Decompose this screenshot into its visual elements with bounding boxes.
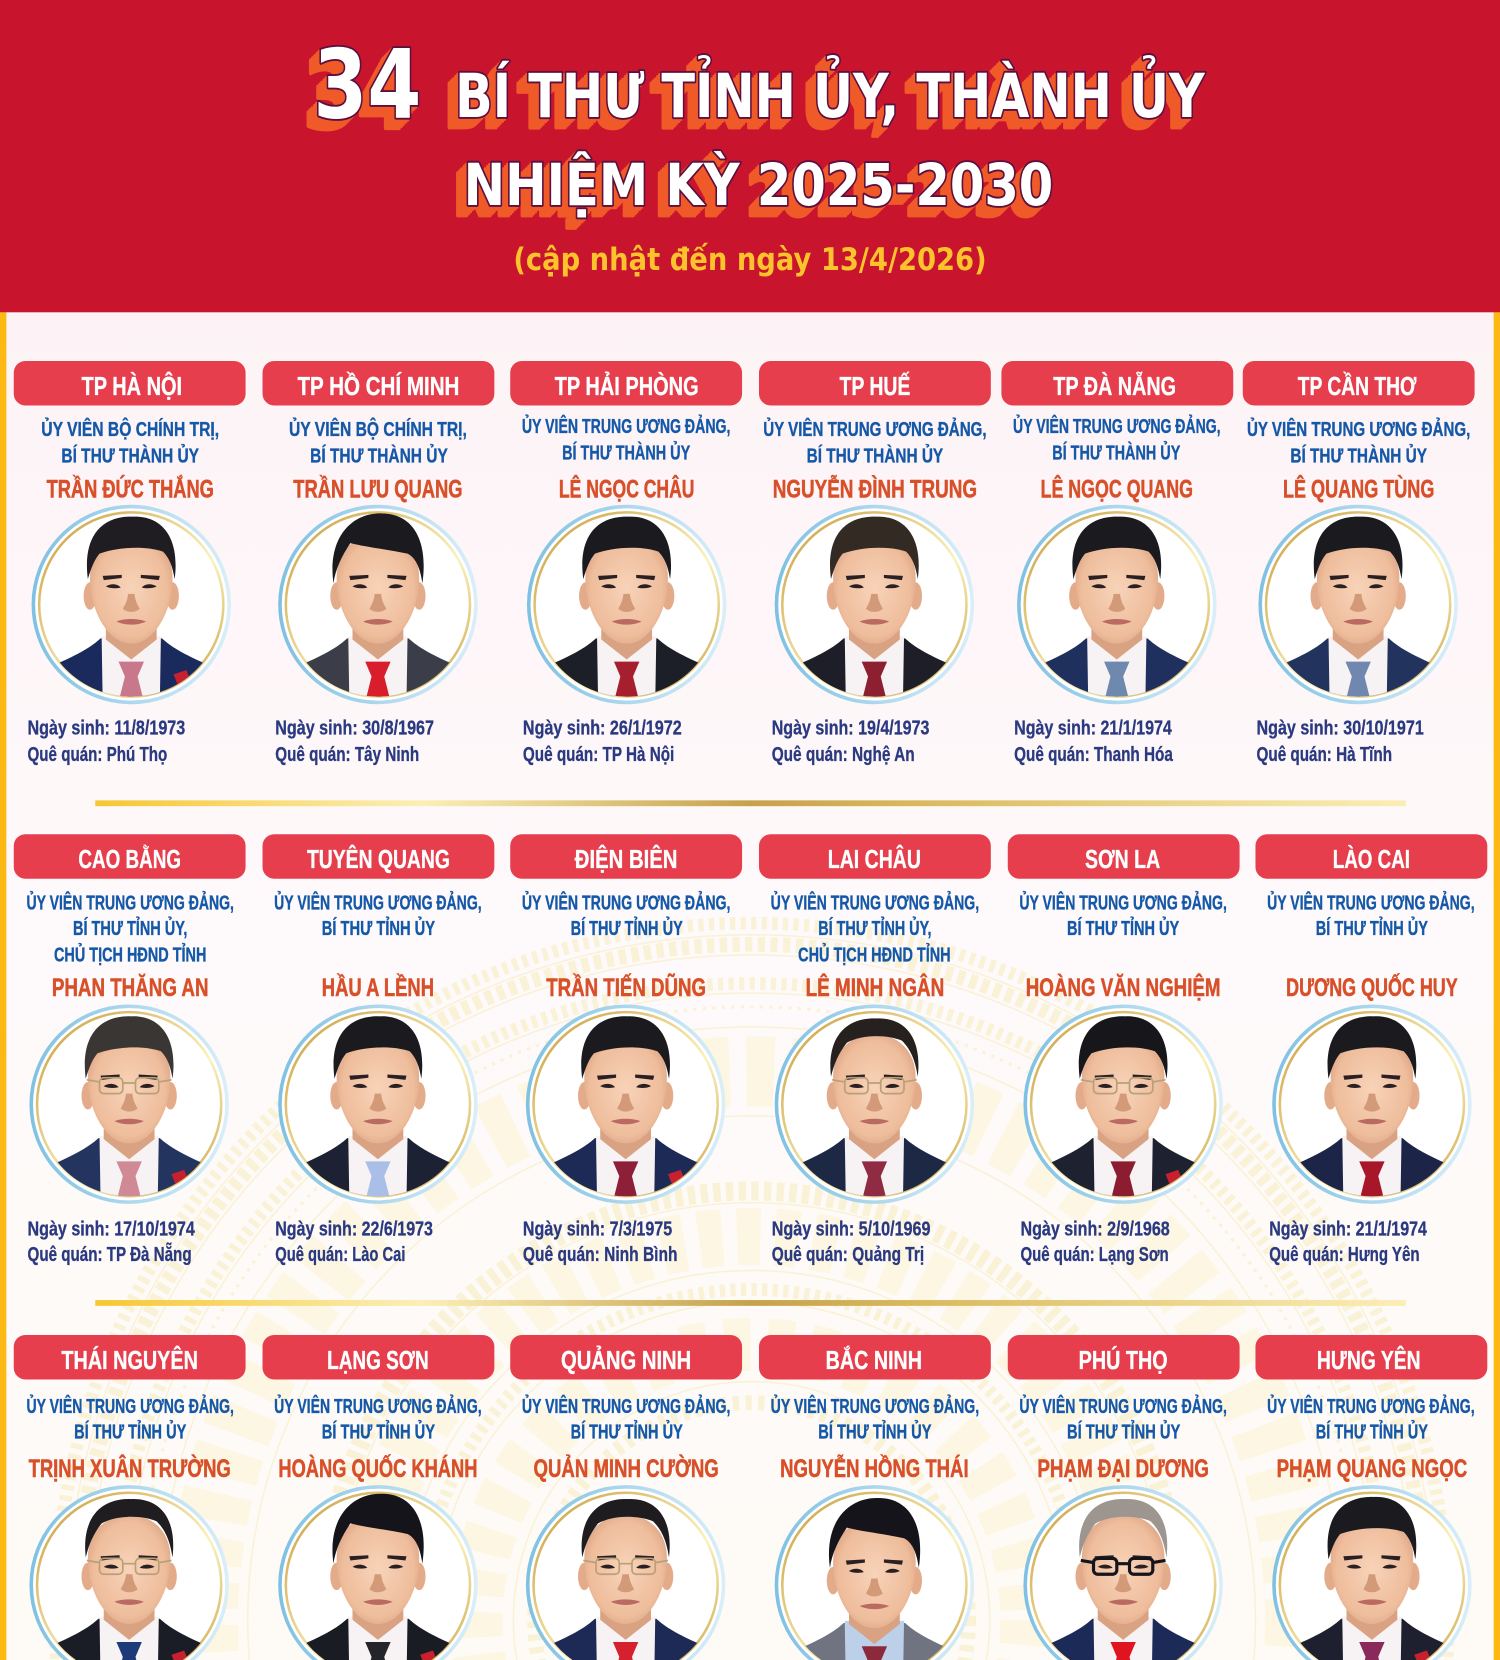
portrait	[528, 1487, 724, 1660]
role: BÍ THƯ THÀNH ỦY	[310, 444, 448, 468]
province pill	[1243, 361, 1475, 405]
province pill: PHÚ THỌ	[1079, 1345, 1168, 1375]
role	[26, 1394, 234, 1444]
name: HẦU A LỀNH	[322, 973, 434, 1002]
role: ỦY VIÊN TRUNG ƯƠNG ĐẢNG,	[771, 890, 979, 914]
province pill	[1008, 834, 1240, 879]
birth and hometown: Quê quán: Thanh Hóa	[1014, 743, 1173, 766]
name: PHẠM ĐẠI DƯƠNG	[1037, 1455, 1209, 1483]
birth and hometown: Quê quán: Hưng Yên	[1269, 1243, 1420, 1266]
birth and hometown: Quê quán: Hà Tĩnh	[1257, 743, 1392, 766]
province pill	[1001, 361, 1233, 405]
name: PHAN THĂNG AN	[52, 973, 209, 1002]
portrait	[528, 1006, 724, 1205]
role	[26, 890, 234, 966]
portrait	[1274, 1487, 1470, 1660]
name: LÊ MINH NGÂN	[806, 972, 944, 1002]
province pill: SƠN LA	[1085, 846, 1160, 874]
role: BÍ THƯ THÀNH ỦY	[562, 440, 690, 464]
role: BÍ THƯ TỈNH ỦY	[322, 1420, 435, 1444]
role: BÍ THƯ TỈNH ỦY	[74, 1420, 186, 1444]
role	[274, 890, 482, 940]
province pill: TUYÊN QUANG	[307, 844, 450, 874]
province pill	[263, 834, 494, 879]
portrait	[776, 507, 972, 705]
portrait	[776, 1487, 972, 1660]
birth and hometown	[1257, 717, 1424, 766]
province pill	[14, 834, 246, 879]
birth and hometown: Ngày sinh: 7/3/1975	[523, 1217, 672, 1240]
role: BÍ THƯ TỈNH ỦY	[1316, 1420, 1428, 1444]
birth and hometown	[275, 1217, 433, 1266]
role	[1019, 890, 1227, 940]
title with extruded shadow: BÍ THƯ TỈNH ỦY, THÀNH ỦY	[455, 54, 1206, 132]
portrait	[33, 507, 229, 705]
portrait	[1025, 1006, 1221, 1205]
title with extruded shadow: NHIỆM KỲ 2025-2030	[464, 150, 1053, 219]
portrait	[1260, 507, 1456, 705]
portrait	[1025, 1487, 1221, 1660]
card: Quảng Ninh	[510, 1335, 742, 1660]
birth and hometown	[1269, 1217, 1427, 1266]
portrait	[31, 1006, 227, 1205]
province pill: QUẢNG NINH	[561, 1345, 691, 1375]
birth and hometown: Quê quán: Lạng Sơn	[1020, 1243, 1169, 1266]
card: TP Cần Thơ	[1243, 361, 1475, 766]
role: ỦY VIÊN BỘ CHÍNH TRỊ,	[289, 417, 467, 441]
card: Phú Thọ	[1008, 1335, 1240, 1660]
role: ỦY VIÊN TRUNG ƯƠNG ĐẢNG,	[1019, 1394, 1227, 1418]
card: Cao Bằng	[14, 834, 246, 1266]
birth and hometown: Quê quán: TP Hà Nội	[523, 743, 674, 766]
role: CHỦ TỊCH HĐND TỈNH	[54, 942, 206, 966]
card: Thái Nguyên	[14, 1335, 246, 1660]
role: ỦY VIÊN TRUNG ƯƠNG ĐẢNG,	[1013, 414, 1221, 438]
name: HOÀNG QUỐC KHÁNH	[278, 1453, 477, 1483]
role: BÍ THƯ TỈNH ỦY	[1067, 1420, 1180, 1444]
name: HOÀNG VĂN NGHIỆM	[1026, 972, 1221, 1002]
portrait	[280, 1006, 476, 1205]
birth and hometown: Ngày sinh: 21/1/1974	[1014, 717, 1172, 740]
role: ỦY VIÊN TRUNG ƯƠNG ĐẢNG,	[26, 890, 234, 914]
province pill: BẮC NINH	[826, 1345, 922, 1375]
role	[522, 414, 730, 464]
role	[1013, 414, 1221, 464]
card: TP Hải Phòng	[510, 361, 742, 766]
province pill	[14, 361, 246, 405]
name: LÊ QUANG TÙNG	[1283, 474, 1434, 504]
role: BÍ THƯ TỈNH ỦY	[571, 916, 683, 940]
birth and hometown	[523, 1217, 677, 1266]
birth and hometown: Quê quán: Lào Cai	[275, 1243, 405, 1266]
portrait	[1019, 507, 1215, 705]
birth and hometown	[1014, 717, 1173, 766]
birth and hometown	[28, 717, 185, 766]
name: NGUYỄN ĐÌNH TRUNG	[773, 474, 977, 504]
province pill	[759, 834, 991, 879]
role: BÍ THƯ THÀNH ỦY	[1290, 444, 1427, 468]
divider row 1	[95, 800, 1406, 806]
card: Lai Châu	[759, 834, 991, 1266]
role: ỦY VIÊN TRUNG ƯƠNG ĐẢNG,	[274, 890, 482, 914]
birth and hometown: Quê quán: Nghệ An	[772, 743, 915, 766]
name: LÊ NGỌC CHÂU	[559, 474, 694, 504]
province pill: TP ĐÀ NẴNG	[1053, 372, 1176, 401]
province pill	[1008, 1335, 1240, 1379]
province pill	[510, 361, 742, 405]
name: LÊ NGỌC QUANG	[1041, 474, 1193, 504]
background: bronze drum pattern	[55, 923, 1448, 1660]
province pill: ĐIỆN BIÊN	[575, 844, 677, 874]
birth and hometown: Ngày sinh: 30/10/1971	[1257, 717, 1424, 740]
role: BÍ THƯ TỈNH ỦY	[571, 1420, 683, 1444]
birth and hometown: Ngày sinh: 19/4/1973	[772, 717, 929, 740]
role: BÍ THƯ THÀNH ỦY	[61, 444, 199, 468]
role: ỦY VIÊN TRUNG ƯƠNG ĐẢNG,	[1019, 890, 1227, 914]
portrait	[31, 1487, 227, 1660]
name: NGUYỄN HỒNG THÁI	[780, 1453, 969, 1483]
birth and hometown: Ngày sinh: 26/1/1972	[523, 717, 682, 740]
birth and hometown: Ngày sinh: 17/10/1974	[28, 1217, 195, 1240]
birth and hometown: Quê quán: TP Đà Nẵng	[28, 1242, 192, 1266]
province pill: TP HÀ NỘI	[82, 371, 182, 401]
name: TRẦN TIẾN DŨNG	[546, 972, 706, 1002]
birth and hometown: Ngày sinh: 5/10/1969	[772, 1217, 930, 1240]
card: TP Huế	[759, 361, 991, 766]
name: QUẢN MINH CƯỜNG	[534, 1453, 719, 1483]
card: TP Hà Nội	[14, 361, 246, 766]
card: Hưng Yên	[1255, 1335, 1487, 1660]
role: ỦY VIÊN TRUNG ƯƠNG ĐẢNG,	[763, 417, 987, 441]
role	[1247, 417, 1470, 468]
birth and hometown	[1020, 1217, 1170, 1266]
role	[771, 1394, 979, 1444]
province pill: LẠNG SƠN	[327, 1347, 429, 1375]
card: TP Hồ Chí Minh	[263, 361, 494, 766]
role: BÍ THƯ TỈNH ỦY,	[73, 916, 187, 940]
birth and hometown: Quê quán: Phú Thọ	[28, 743, 167, 766]
portrait	[776, 1006, 972, 1205]
birth and hometown	[275, 717, 434, 766]
role: CHỦ TỊCH HĐND TỈNH	[798, 942, 951, 966]
role: BÍ THƯ THÀNH ỦY	[807, 444, 943, 468]
portrait	[280, 507, 476, 705]
role: ỦY VIÊN TRUNG ƯƠNG ĐẢNG,	[274, 1394, 482, 1418]
role: BÍ THƯ TỈNH ỦY	[1067, 916, 1179, 940]
card: Điện Biên	[510, 834, 742, 1266]
role	[274, 1394, 482, 1444]
province pill: THÁI NGUYÊN	[61, 1345, 198, 1375]
birth and hometown: Ngày sinh: 22/6/1973	[275, 1217, 433, 1240]
province pill	[759, 361, 991, 405]
province pill: TP HỒ CHÍ MINH	[297, 371, 459, 401]
role: BÍ THƯ TỈNH ỦY	[322, 916, 435, 940]
portrait	[1274, 1006, 1470, 1205]
birth and hometown	[772, 1217, 930, 1266]
role: BÍ THƯ TỈNH ỦY,	[818, 916, 932, 940]
role	[763, 417, 987, 468]
role	[289, 417, 467, 468]
province pill: TP CẦN THƠ	[1298, 372, 1417, 401]
province pill: CAO BẰNG	[78, 845, 181, 874]
divider row 2	[95, 1300, 1406, 1306]
role	[771, 890, 979, 966]
role: ỦY VIÊN TRUNG ƯƠNG ĐẢNG,	[771, 1394, 979, 1418]
role: ỦY VIÊN TRUNG ƯƠNG ĐẢNG,	[522, 414, 730, 438]
birth and hometown: Quê quán: Tây Ninh	[275, 743, 419, 766]
role: ỦY VIÊN TRUNG ƯƠNG ĐẢNG,	[522, 1394, 730, 1418]
birth and hometown	[523, 717, 682, 766]
role	[1267, 1394, 1475, 1444]
card: Lào Cai	[1255, 834, 1487, 1266]
province pill: TP HUẾ	[839, 372, 910, 401]
subtitle date: (cập nhật đến ngày 13/4/2026)	[513, 243, 987, 278]
card: TP Đà Nẵng	[1001, 361, 1233, 766]
role: BÍ THƯ THÀNH ỦY	[1052, 440, 1180, 464]
right border bar	[1494, 312, 1500, 1660]
role: BÍ THƯ TỈNH ỦY	[818, 1420, 932, 1444]
name: TRẦN LƯU QUANG	[293, 475, 463, 504]
birth and hometown	[772, 717, 929, 766]
birth and hometown: Ngày sinh: 30/8/1967	[275, 717, 434, 740]
birth and hometown: Quê quán: Ninh Bình	[523, 1243, 677, 1266]
role	[41, 417, 219, 468]
card: Tuyên Quang	[263, 834, 494, 1266]
birth and hometown: Ngày sinh: 11/8/1973	[28, 717, 185, 740]
card: Sơn La	[1008, 834, 1240, 1266]
province pill	[510, 1335, 742, 1379]
province pill	[510, 834, 742, 879]
role: ỦY VIÊN TRUNG ƯƠNG ĐẢNG,	[522, 890, 730, 914]
birth and hometown: Quê quán: Quảng Trị	[772, 1243, 924, 1266]
role	[1267, 890, 1475, 940]
name: TRẦN ĐỨC THẮNG	[47, 474, 214, 504]
role: BÍ THƯ TỈNH ỦY	[1316, 916, 1428, 940]
province pill: LAI CHÂU	[828, 844, 921, 874]
province pill: TP HẢI PHÒNG	[555, 371, 699, 401]
role: ỦY VIÊN TRUNG ƯƠNG ĐẢNG,	[26, 1394, 234, 1418]
left border bar	[0, 312, 6, 1660]
role	[1019, 1394, 1227, 1444]
province pill	[14, 1335, 246, 1379]
card: Bắc Ninh	[759, 1335, 991, 1660]
birth and hometown	[28, 1217, 195, 1266]
role	[522, 890, 730, 940]
province pill	[263, 361, 494, 405]
portrait	[280, 1487, 476, 1660]
province pill	[263, 1335, 494, 1379]
title with extruded shadow	[313, 31, 1206, 219]
title with extruded shadow: 34	[313, 31, 421, 141]
card: Lạng Sơn	[263, 1335, 494, 1660]
province pill: HƯNG YÊN	[1317, 1345, 1421, 1375]
role	[522, 1394, 730, 1444]
role: ỦY VIÊN BỘ CHÍNH TRỊ,	[41, 417, 219, 441]
province pill	[1255, 834, 1487, 879]
birth and hometown: Ngày sinh: 2/9/1968	[1020, 1217, 1170, 1240]
portrait	[529, 507, 725, 705]
province pill	[759, 1335, 991, 1379]
province pill	[1255, 1335, 1487, 1379]
province pill: LÀO CAI	[1333, 845, 1410, 874]
birth and hometown: Ngày sinh: 21/1/1974	[1269, 1217, 1427, 1240]
header band	[0, 0, 1500, 312]
name: TRỊNH XUÂN TRƯỜNG	[29, 1453, 231, 1483]
